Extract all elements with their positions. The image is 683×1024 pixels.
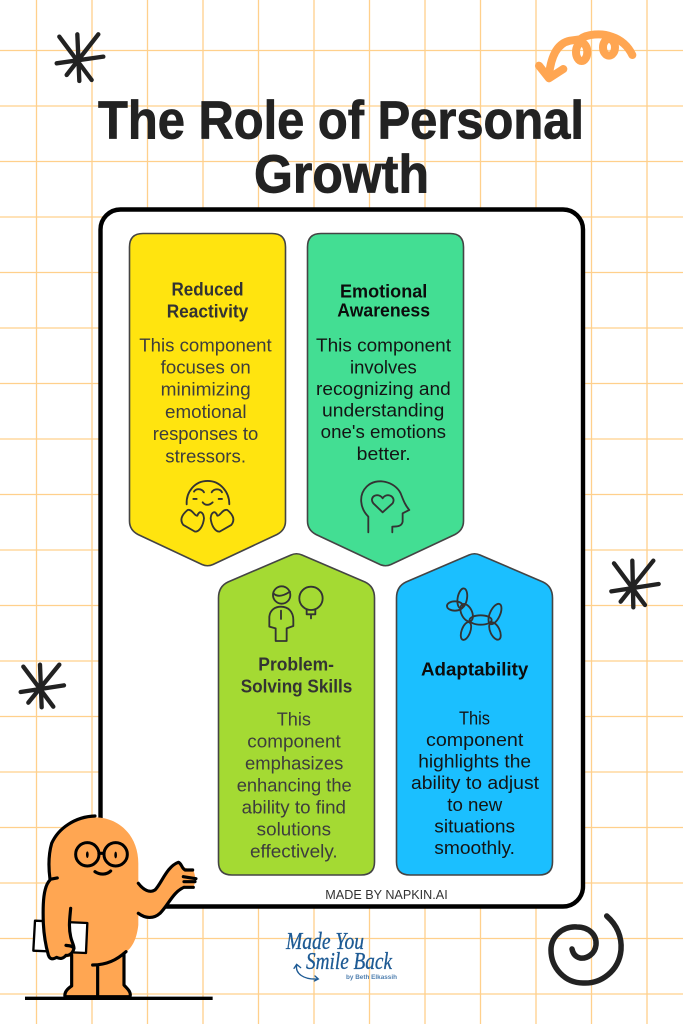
card text: This — [277, 709, 311, 730]
card text: smoothly. — [434, 837, 515, 858]
card text: minimizing — [161, 379, 251, 400]
title: Growth — [254, 144, 429, 204]
book — [33, 921, 87, 953]
logo: Made You Smile Back: by Beth Elkassih — [346, 974, 397, 981]
card text — [411, 707, 539, 858]
card text — [316, 335, 451, 464]
logo: Made You Smile Back — [285, 929, 397, 981]
card text: effectively. — [250, 841, 338, 862]
card heading: Problem- — [258, 653, 334, 674]
card text — [237, 709, 352, 862]
card heading — [167, 279, 249, 322]
card heading: Solving Skills — [241, 675, 352, 696]
card text: stressors. — [165, 446, 246, 466]
card heading: Awareness — [337, 300, 430, 321]
card text: understanding — [322, 400, 444, 421]
card text: enhancing the — [237, 775, 352, 796]
card: Emotional Awareness — [308, 234, 464, 566]
card text: involves — [350, 356, 417, 377]
title: The Role of Personal — [98, 90, 584, 150]
card text: emphasizes — [245, 753, 343, 774]
icon: person with lightbulb — [269, 586, 323, 641]
card text: This component — [316, 335, 451, 356]
card text: This — [459, 707, 490, 728]
card text: component — [247, 731, 341, 752]
card text: ability to find — [242, 797, 346, 818]
card text: situations — [434, 816, 515, 837]
card: Problem-Solving Skills — [218, 554, 374, 875]
card heading: Reduced — [172, 279, 244, 300]
card text: solutions — [257, 819, 331, 840]
face — [76, 843, 127, 874]
card text: highlights the — [418, 750, 531, 772]
card: Reduced Reactivity — [130, 234, 286, 566]
card text: to new — [447, 794, 503, 815]
card text: emotional — [165, 401, 246, 422]
title — [98, 90, 584, 204]
card text — [139, 335, 272, 466]
icon: asterisk right — [611, 561, 659, 607]
credit: made by napkin.ai: MADE BY NAPKIN.AI — [325, 887, 448, 902]
character: orange mascot — [25, 816, 213, 998]
card heading: Reactivity — [167, 301, 249, 322]
logo: Made You Smile Back: Smile Back — [306, 949, 392, 975]
card text: better. — [357, 443, 411, 464]
card: Adaptability — [396, 554, 552, 875]
logo: Made You Smile Back: Made You — [285, 929, 364, 955]
card text: focuses on — [161, 357, 251, 378]
card heading — [337, 281, 430, 321]
card text: one's emotions — [321, 421, 446, 442]
card text: component — [426, 729, 523, 750]
main panel — [100, 210, 583, 906]
ground line — [25, 993, 213, 1003]
card heading — [241, 653, 352, 696]
icon: asterisk top left — [57, 34, 103, 81]
icon: balloon dog — [447, 588, 504, 641]
card text: responses to — [153, 423, 258, 444]
card text: This component — [139, 335, 272, 356]
outline — [43, 816, 196, 997]
icon: orange curly arrow — [539, 34, 632, 78]
card heading: Adaptability — [421, 659, 529, 680]
icon: asterisk left — [21, 665, 64, 707]
icon: head with heart — [361, 481, 409, 532]
icon: spiral — [551, 916, 621, 983]
card heading: Emotional — [340, 281, 427, 302]
icon: hugging face — [181, 481, 233, 532]
card text: ability to adjust — [411, 772, 539, 793]
card text: recognizing and — [316, 378, 451, 399]
